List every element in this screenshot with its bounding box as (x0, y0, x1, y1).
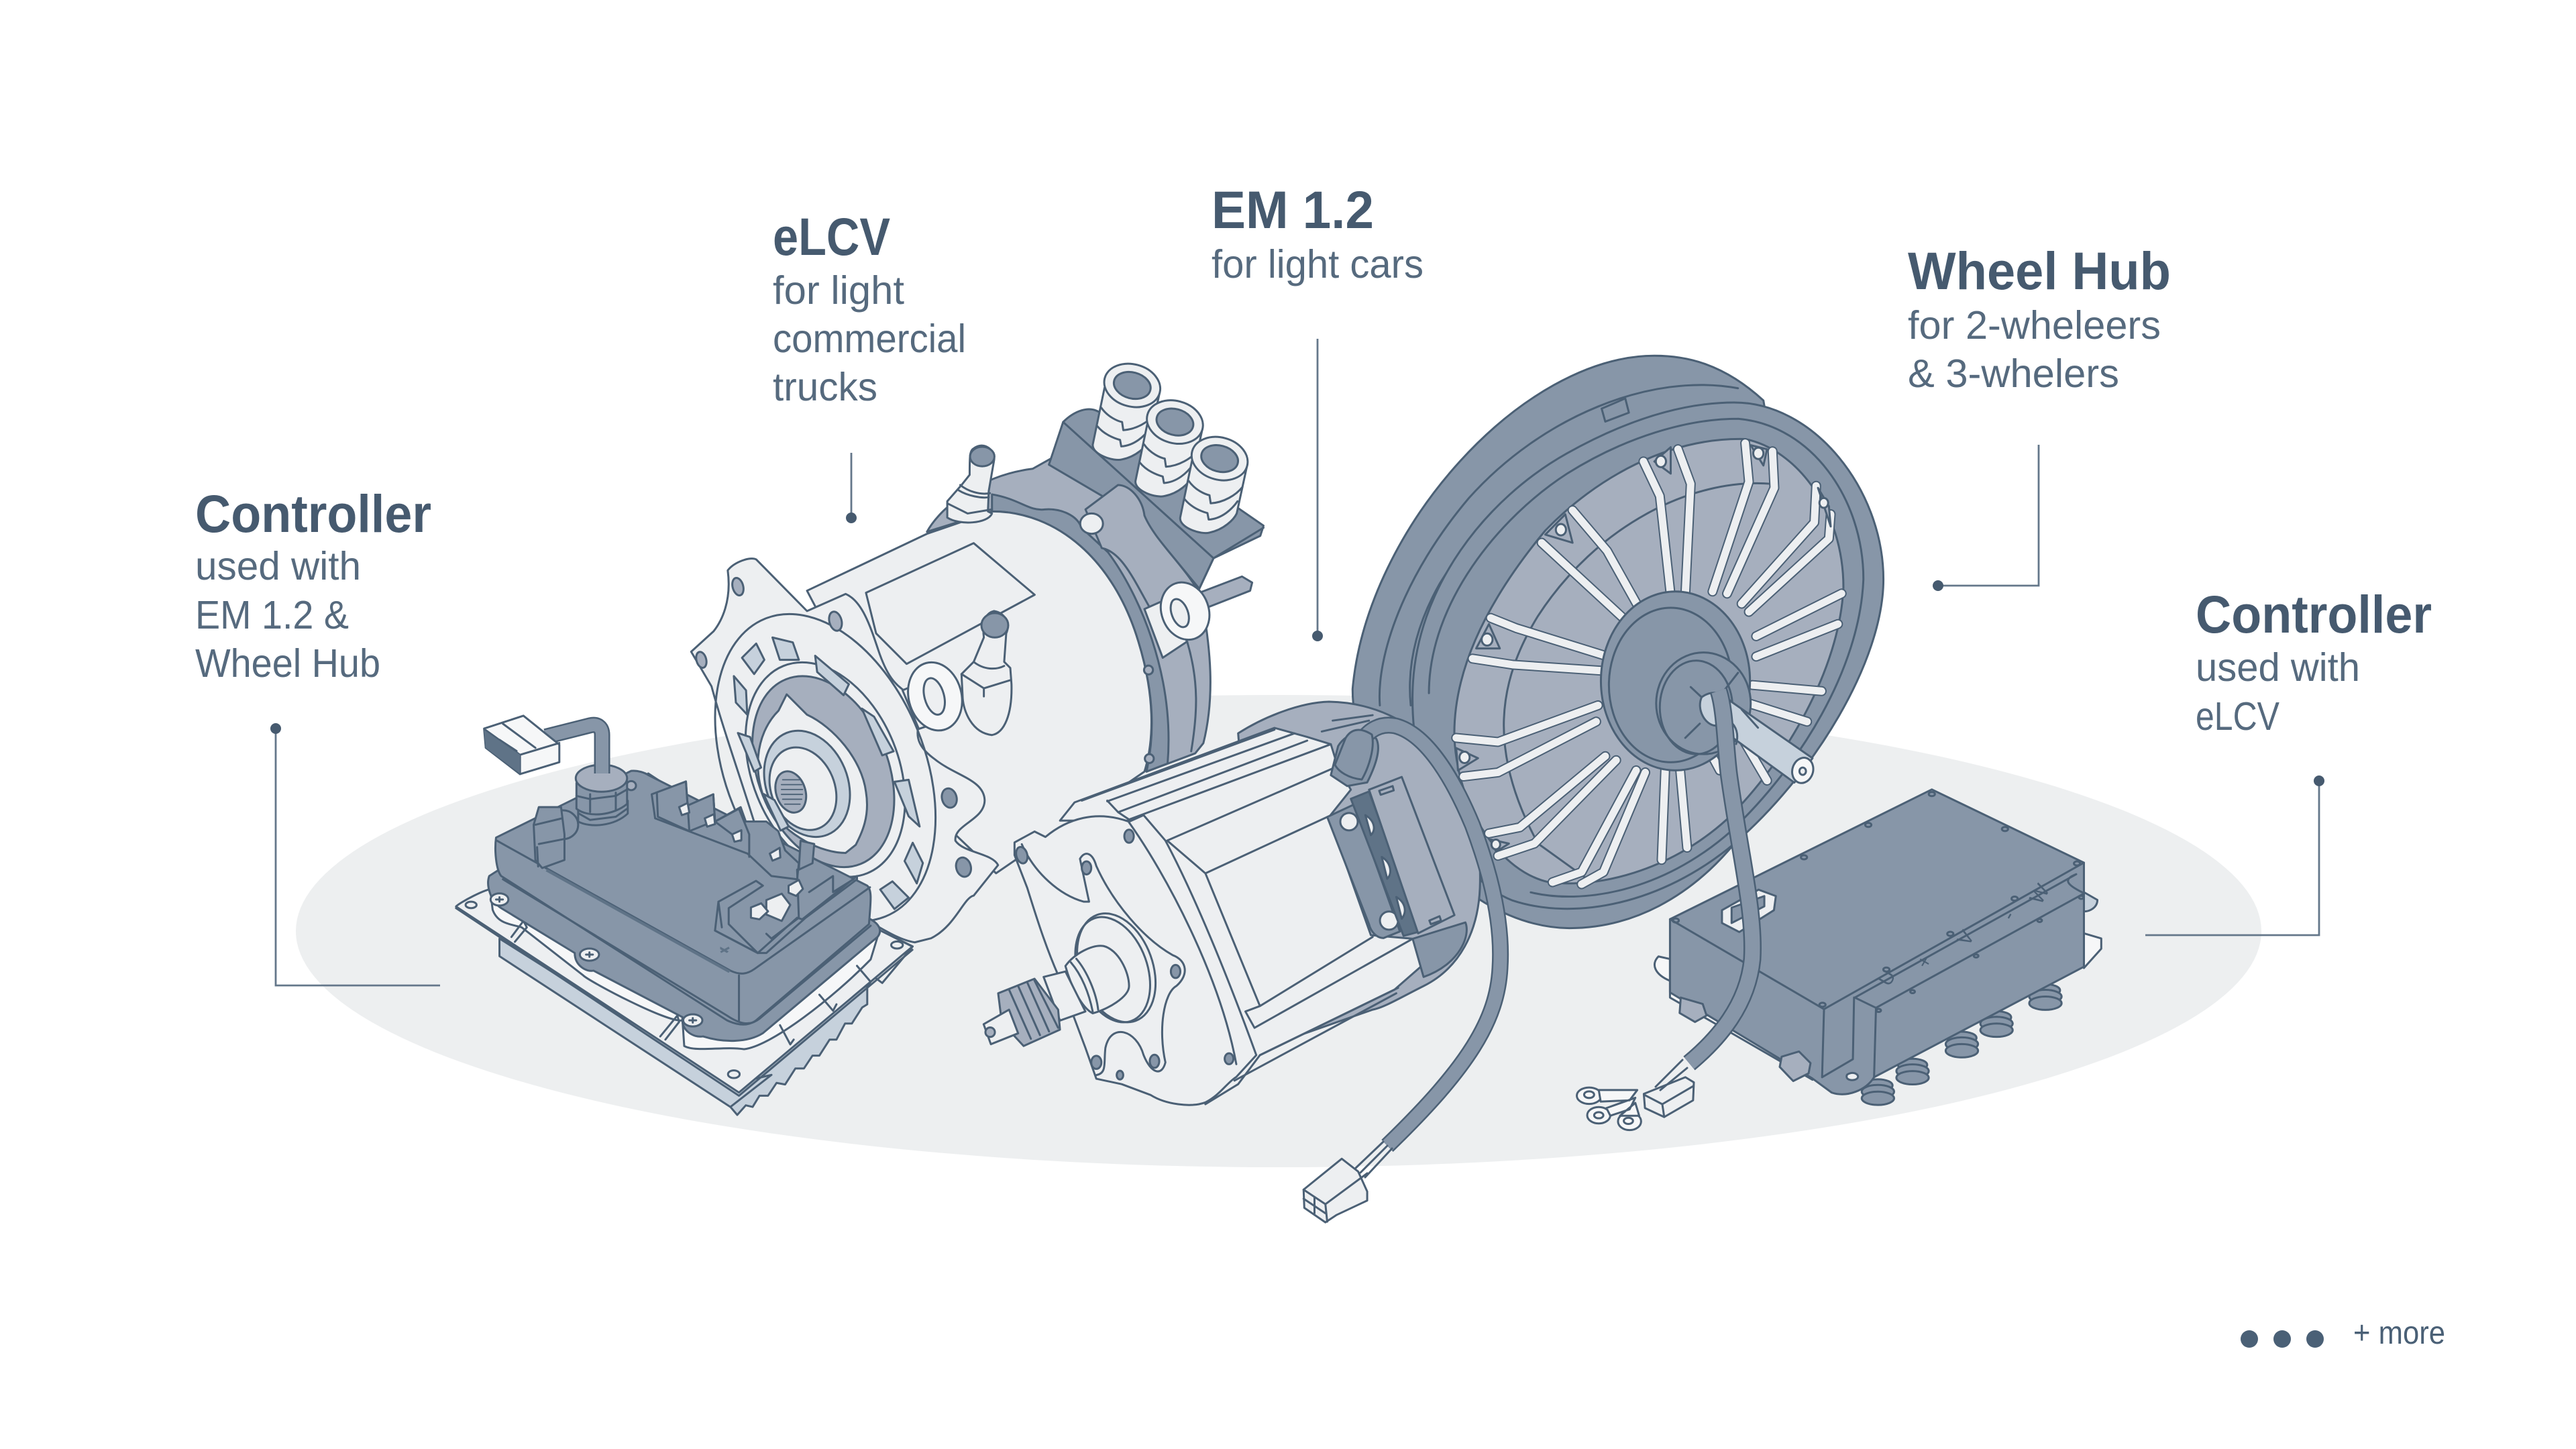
label: Wheel Hub: Wheel Hub (1908, 241, 2171, 301)
illustration: EM 1.2 cable and connector (1303, 725, 1501, 1222)
terminal labels on right controller: W (2025, 880, 2055, 908)
label: EM 1.2: EM 1.2 (1212, 180, 1374, 239)
terminal labels on right controller: - (1997, 907, 2020, 924)
label: eLCV: commercial (773, 317, 966, 361)
leader: Controller right (2145, 775, 2324, 935)
illustration: left controller (456, 716, 912, 1115)
ground ellipse (296, 695, 2261, 1167)
terminal labels on right controller: U (1874, 966, 1900, 990)
terminal labels on right controller (1874, 880, 2055, 990)
label: Wheel Hub (1908, 241, 2171, 396)
label: EM 1.2 (1212, 180, 1424, 286)
terminal labels on right controller: + (1912, 951, 1937, 973)
label: EM 1.2: for light cars (1212, 242, 1424, 286)
label: Wheel Hub: for 2-wheleers (1908, 303, 2161, 347)
illustration: EM 1.2 motor (983, 702, 1480, 1105)
label: Controller right: eLCV (2196, 694, 2280, 739)
leader: EM 1.2 (1312, 339, 1323, 641)
label: Controller left: Wheel Hub (195, 641, 380, 686)
leader: Controller left (270, 723, 440, 985)
label: Controller right: Controller (2196, 584, 2432, 644)
label: Controller left: EM 1.2 & (195, 593, 349, 637)
label: Controller left (195, 484, 431, 686)
illustration: wheel hub cable (1656, 691, 1752, 1090)
illustration: right controller (1577, 790, 2101, 1130)
label: Controller right (2196, 584, 2432, 739)
leader: Wheel Hub (1933, 445, 2039, 591)
label: eLCV: for light (773, 268, 904, 313)
label: Controller right: used with (2196, 645, 2360, 690)
leader: eLCV (846, 453, 857, 523)
more indicator: + more (2353, 1316, 2445, 1351)
label: eLCV (773, 207, 966, 409)
illustration: wheel hub motor (1352, 356, 1884, 928)
label: Controller left: Controller (195, 484, 431, 543)
label: eLCV: trucks (773, 365, 877, 409)
illustration: eLCV motor (673, 358, 1264, 983)
label: Wheel Hub: & 3-whelers (1908, 352, 2119, 396)
terminal labels on right controller: V (1953, 927, 1979, 950)
label: Controller left: used with (195, 544, 361, 588)
label: eLCV: eLCV (773, 207, 890, 266)
more indicator (2241, 1316, 2445, 1351)
